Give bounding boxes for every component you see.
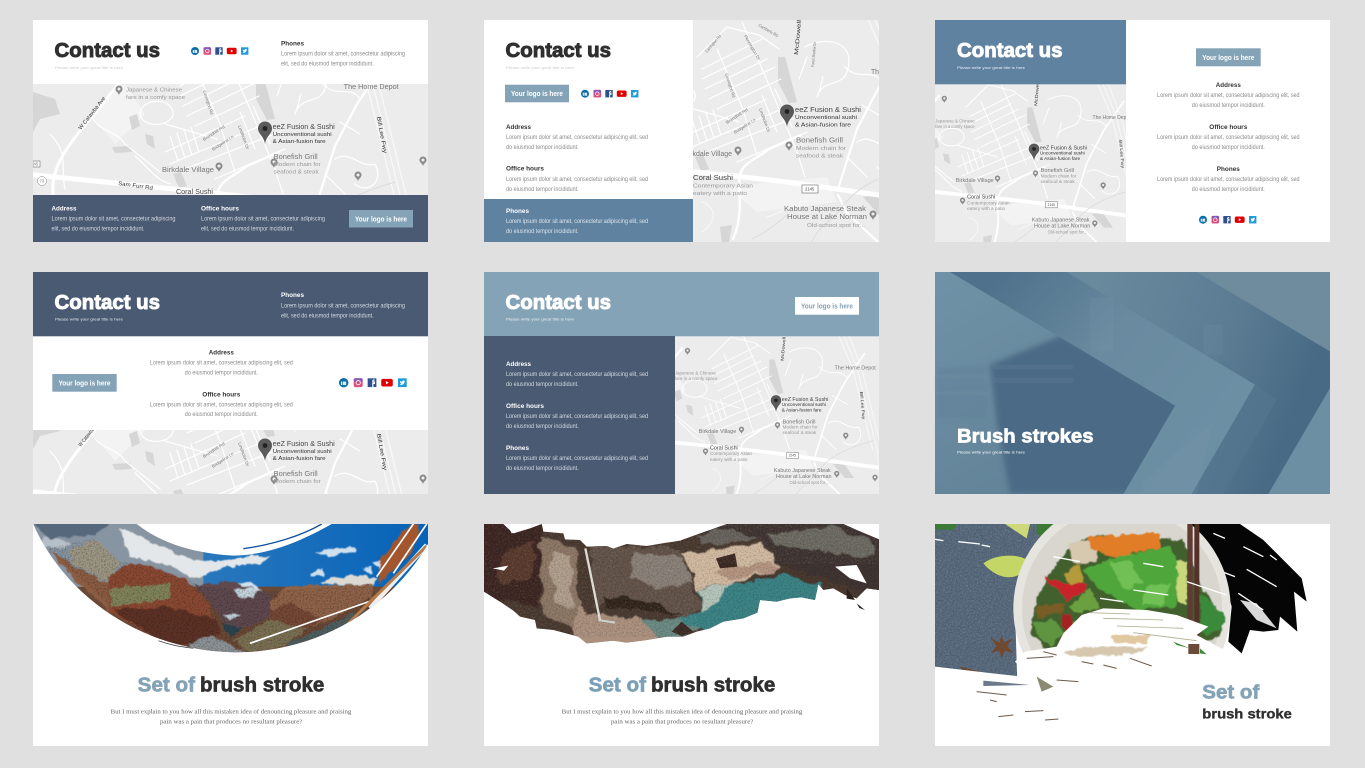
map 2: Th: [871, 69, 879, 76]
logo button: Your logo is here: [801, 304, 853, 310]
address text: [506, 124, 648, 151]
map 1: Sam Furr Rd: [118, 181, 153, 192]
map strip: Bonefish Grill: [274, 471, 318, 478]
panel: set of brush stroke, canyon crescent: [23, 513, 430, 746]
address text: do eiusmod tempor incididunt.: [1192, 103, 1265, 109]
office hours text: Office hours: [201, 206, 239, 212]
subtitle: Please write your great title is here: [55, 65, 124, 70]
chevron background: [935, 272, 1330, 494]
map 1: eeZ Fusion & Sushi: [273, 124, 335, 131]
map 2: Old-school spot for...: [807, 223, 865, 229]
office hours text: [506, 403, 648, 430]
map 5: Contemporary Asian: [710, 451, 753, 456]
map 2: Camberly Rd: [758, 23, 780, 38]
phones text: Lorem ipsum dolor sit amet, consectetur adipiscing: [281, 303, 405, 309]
office hours text: [1157, 124, 1300, 151]
office hours text: Office hours: [506, 403, 544, 410]
phones text: [506, 445, 648, 472]
map 1: Japanese & Chinese: [126, 87, 182, 93]
address text: do eiusmod tempor incididunt.: [185, 370, 258, 376]
map 5: Old-school spot for...: [790, 480, 829, 485]
phones text: elit, sed do eiusmod tempor incididunt.: [281, 62, 374, 68]
map 2: Carrington Rd: [704, 33, 722, 54]
map 3: Modern chain for: [1041, 173, 1077, 178]
phones band: Phones: [506, 208, 529, 215]
beach photo brush shape: [484, 524, 879, 644]
map 2: Contemporary Asian: [693, 184, 753, 190]
office hours text: do eiusmod tempor incididunt.: [506, 187, 579, 193]
address text: do eiusmod tempor incididunt.: [506, 382, 579, 388]
social icons: [191, 47, 248, 55]
social icons: [1199, 216, 1256, 224]
address text: Address: [506, 361, 531, 368]
title: [589, 675, 775, 697]
map 3: eeZ Fusion & Sushi: [1040, 145, 1087, 151]
address text: [506, 361, 648, 388]
logo button: Your logo is here: [58, 380, 111, 388]
phones text: Lorem ipsum dolor sit amet, consectetur adipiscing: [281, 52, 405, 58]
address text: Address: [506, 124, 531, 131]
map 2: Lindholm Dr: [758, 108, 772, 133]
map 3: Birkdale Village: [956, 178, 994, 184]
map 3: The Home Depot: [1093, 115, 1131, 121]
map 2: [684, 20, 879, 242]
map strip: Modern chain for: [274, 479, 321, 485]
office hours text: Lorem ipsum dolor sit amet, consectetur adipiscing elit, sed: [1157, 135, 1300, 141]
social icons: [581, 90, 638, 98]
map 2: House at Lake Norman: [787, 214, 867, 221]
map 5: The Home Depot: [834, 365, 876, 371]
map strip: W Catawba Ave: [78, 421, 101, 448]
map strip: Lindholm Dr: [237, 442, 251, 467]
heading: Contact us: [957, 40, 1062, 62]
map 1: 45: [34, 162, 39, 166]
map 5: eeZ Fusion & Sushi: [782, 397, 828, 403]
description: [111, 708, 352, 725]
phones text: [281, 292, 405, 319]
office hours text: do eiusmod tempor incididunt.: [185, 412, 258, 418]
map 3: Contemporary Asian: [967, 200, 1010, 205]
office hours text: Lorem ipsum dolor sit amet, consectetur adipiscing elit, sed: [506, 414, 648, 420]
title: brush stroke: [651, 675, 775, 697]
social icons: [339, 378, 407, 387]
phones text: [1157, 166, 1300, 193]
map 1: [33, 84, 428, 196]
map 1: Lindholm Dr: [237, 125, 251, 150]
logo button: [349, 210, 413, 228]
logo button: Your logo is here: [355, 216, 407, 224]
map 2: eeZ Fusion & Sushi: [795, 107, 861, 114]
office hours text: Office hours: [1209, 124, 1248, 131]
description: But I must explain to you how all this mistaken idea of denouncing pleasure and praising: [111, 708, 352, 716]
address text: Address: [209, 350, 234, 356]
map 1: seafood & steak: [274, 169, 319, 175]
navy footer band: [33, 195, 428, 242]
map 1: W Catawba Ave: [78, 96, 107, 131]
address text: do eiusmod tempor incididunt.: [506, 145, 579, 151]
address text: Address: [1216, 82, 1241, 89]
map 3: 2145: [1048, 203, 1055, 207]
map 3: House at Lake Norman: [1034, 224, 1090, 230]
map 2: Kabuto Japanese Steak: [784, 206, 867, 213]
map 3: McDowell: [1033, 81, 1040, 106]
map 3: Old-school spot for...: [1048, 230, 1087, 235]
map 1: Carrington Rd: [202, 90, 215, 116]
title: Set of: [1202, 681, 1260, 703]
office hours text: do eiusmod tempor incididunt.: [506, 424, 579, 430]
map 2: Modern chain for: [796, 146, 846, 152]
phones text: do eiusmod tempor incididunt.: [1192, 187, 1265, 193]
map 1: Coral Sushi: [176, 189, 213, 196]
navy sidebar: [484, 336, 675, 494]
map 2: 2145: [805, 186, 815, 192]
map 3: & Asian-fusion fare: [1040, 156, 1081, 161]
title: brush stroke: [200, 675, 324, 697]
map 5: Kabuto Japanese Steak: [774, 468, 831, 474]
panel: set of brush stroke, food bowl with ink: [935, 500, 1330, 746]
map 3: Unconventional sushi: [1040, 151, 1085, 156]
phones text: Phones: [1217, 166, 1240, 173]
map 1: & Asian-fusion fare: [273, 139, 326, 145]
address text: [52, 206, 176, 232]
map 2: Bridgeline Ln: [733, 117, 757, 135]
map strip: [33, 421, 428, 494]
office hours text: Lorem ipsum dolor sit amet, consectetur adipiscing elit, sed: [506, 177, 648, 183]
white inner brush arc: [137, 524, 332, 556]
office hours text: Office hours: [506, 166, 544, 172]
map 1: Bridgeline Ln: [211, 134, 235, 152]
address text: Address: [52, 206, 77, 212]
map 2: Brandhill Rd: [725, 107, 749, 125]
description: [562, 708, 803, 725]
map 1: Bonefish Grill: [274, 154, 318, 161]
map 2: Coral Sushi: [693, 175, 733, 182]
map 1: fare in a comfy space: [126, 95, 185, 101]
map 5: fare in a comfy space: [675, 376, 718, 381]
map 1: Brandhill Rd: [202, 124, 226, 142]
light header: [484, 272, 879, 336]
map 5: 2145: [789, 454, 796, 458]
map 3: seafood & steak: [1041, 179, 1076, 184]
phones band: [484, 199, 693, 242]
office hours text: elit, sed do eiusmod tempor incididunt.: [201, 226, 294, 232]
panel: brush strokes section slide with chevrons: [935, 272, 1330, 494]
address text: Lorem ipsum dolor sit amet, consectetur adipiscing elit, sed: [150, 361, 293, 367]
canyon photo crescent: [34, 524, 428, 652]
subtitle: Please write your great title is here: [506, 65, 575, 70]
subtitle: Please write your great title is here: [55, 316, 124, 322]
map 3: Bonefish Grill: [1041, 168, 1074, 174]
address text: [1157, 82, 1300, 109]
address text: Lorem ipsum dolor sit amet, consectetur adipiscing elit, sed: [506, 135, 648, 141]
map 2: Carrington Rd: [724, 73, 737, 99]
map 3: [935, 81, 1131, 242]
map strip: Unconventional sushi: [273, 449, 332, 455]
map 1: Birkdale Village: [162, 167, 214, 174]
office hours text: [150, 392, 293, 418]
address text: [150, 350, 293, 376]
map 5: McDowell: [780, 337, 787, 361]
map 5: & Asian-fusion fare: [782, 407, 822, 412]
map 5: House at Lake Norman: [776, 474, 832, 480]
panel: contact slide 3, blue header with map left: [806, 20, 1330, 282]
phones text: do eiusmod tempor incididunt.: [506, 466, 579, 472]
phones text: Lorem ipsum dolor sit amet, consectetur adipiscing elit, sed: [506, 456, 648, 462]
heading: Contact us: [54, 40, 160, 62]
map 2: Forest Shadow Cir: [810, 41, 817, 67]
map 2: eatery with a patio: [693, 191, 747, 197]
subtitle: Please write your great title is here: [957, 65, 1026, 70]
navy header: [33, 272, 428, 336]
office hours text: [201, 206, 325, 232]
map 5: Birkdale Village: [699, 429, 736, 435]
office hours text: Lorem ipsum dolor sit amet, consectetur adipiscing elit, sed: [150, 402, 293, 408]
office hours text: do eiusmod tempor incididunt.: [1192, 145, 1265, 151]
description: pain was a pain that produces no resultant pleasure?: [611, 718, 753, 725]
map 3: Japanese & Chinese: [935, 119, 975, 124]
white brush sweep: [935, 608, 1242, 746]
map 2: Unconventional sushi: [795, 115, 857, 121]
map 3: Coral Sushi: [967, 195, 995, 201]
map 5: eatery with a patio: [710, 457, 748, 462]
map 1: Modern chain for: [274, 162, 321, 168]
phones text: Phones: [281, 40, 304, 48]
map 3: Kabuto Japanese Steak: [1032, 217, 1090, 223]
map 5: Bonefish Grill: [783, 419, 816, 425]
heading: Brush strokes: [957, 425, 1094, 447]
logo button: [52, 374, 117, 392]
subtitle: Please write your great title is here: [506, 316, 575, 322]
office hours text: Lorem ipsum dolor sit amet, consectetur adipiscing: [201, 216, 325, 222]
phones band: Lorem ipsum dolor sit amet, consectetur adipiscing elit, sed: [506, 219, 648, 225]
map 1: Unconventional sushi: [273, 132, 332, 138]
description: But I must explain to you how all this mistaken idea of denouncing pleasure and praising: [562, 708, 803, 716]
map 2: seafood & steak: [796, 154, 843, 160]
panel: set of brush stroke, coastal beach brush: [473, 513, 887, 746]
office hours text: [506, 166, 648, 193]
description: pain was a pain that produces no resultant pleasure?: [160, 718, 302, 725]
title: [138, 675, 324, 697]
logo button: [505, 85, 569, 102]
food photo with ink splash: [935, 524, 1307, 720]
address text: Lorem ipsum dolor sit amet, consectetur adipiscing: [52, 216, 176, 222]
phones text: Lorem ipsum dolor sit amet, consectetur adipiscing elit, sed: [1157, 177, 1300, 183]
map 3: eatery with a patio: [967, 206, 1006, 211]
logo button: Your logo is here: [511, 91, 563, 98]
map 5: Japanese & Chinese: [675, 370, 717, 375]
phones text: Phones: [281, 292, 304, 299]
map 5: Coral Sushi: [710, 446, 738, 452]
phones band: do eiusmod tempor incididunt.: [506, 229, 579, 235]
blue header: [935, 20, 1126, 84]
map 1: The Home Depot: [344, 84, 399, 91]
phones text: [281, 40, 405, 68]
heading: Contact us: [506, 40, 611, 62]
panel: contact slide 1, white header with map: [0, 0, 525, 304]
map 5: Unconventional sushi: [782, 402, 826, 407]
map 5: Bill Lee Fwy: [859, 391, 866, 421]
map 2: Bonefish Grill: [796, 138, 843, 144]
map 2: McDowell: [794, 20, 803, 55]
address text: Lorem ipsum dolor sit amet, consectetur adipiscing elit, sed: [506, 372, 648, 378]
map strip: eeZ Fusion & Sushi: [273, 441, 335, 448]
map 1: Bill Lee Fwy: [375, 116, 387, 154]
panel: contact slide 5, light header, navy sidebar, map: [484, 272, 971, 532]
map 5: Modern chain for: [783, 425, 818, 430]
map 2: & Asian-fusion fare: [795, 122, 851, 128]
panel: contact slide 2, map on right: [484, 0, 1047, 287]
panel: contact slide 4, navy header with map strip: [0, 272, 525, 621]
map 3: fare in a comfy space: [935, 124, 975, 129]
map 5: [675, 336, 879, 494]
map strip: Bill Lee Fwy: [375, 433, 387, 471]
subtitle: Please write your great title is here: [957, 450, 1026, 454]
title: Set of: [589, 675, 646, 697]
map 1: 73: [40, 178, 45, 184]
office hours text: Office hours: [202, 392, 241, 398]
map strip: Brandhill Rd: [202, 441, 226, 459]
title: Set of: [138, 675, 195, 697]
logo button: [795, 297, 859, 315]
map 2: Birkdale Village: [684, 151, 732, 158]
logo button: Your logo is here: [1202, 55, 1254, 62]
address text: elit, sed do eiusmod tempor incididunt.: [52, 226, 145, 232]
address text: Lorem ipsum dolor sit amet, consectetur adipiscing elit, sed: [1157, 93, 1300, 99]
phones text: elit, sed do eiusmod tempor incididunt.: [281, 313, 374, 319]
subtitle: brush stroke: [1202, 705, 1292, 721]
logo button: [1196, 48, 1261, 66]
map 5: seafood & steak: [783, 430, 817, 435]
map 3: Bill Lee Fwy: [1118, 140, 1126, 169]
map strip: Bridgeline Ln: [211, 451, 235, 469]
heading: Contact us: [54, 292, 160, 314]
map 2: Pennington Dr: [743, 34, 762, 61]
heading: Contact us: [506, 292, 611, 314]
map strip: & Asian-fusion fare: [273, 456, 326, 462]
phones text: Phones: [506, 445, 529, 452]
